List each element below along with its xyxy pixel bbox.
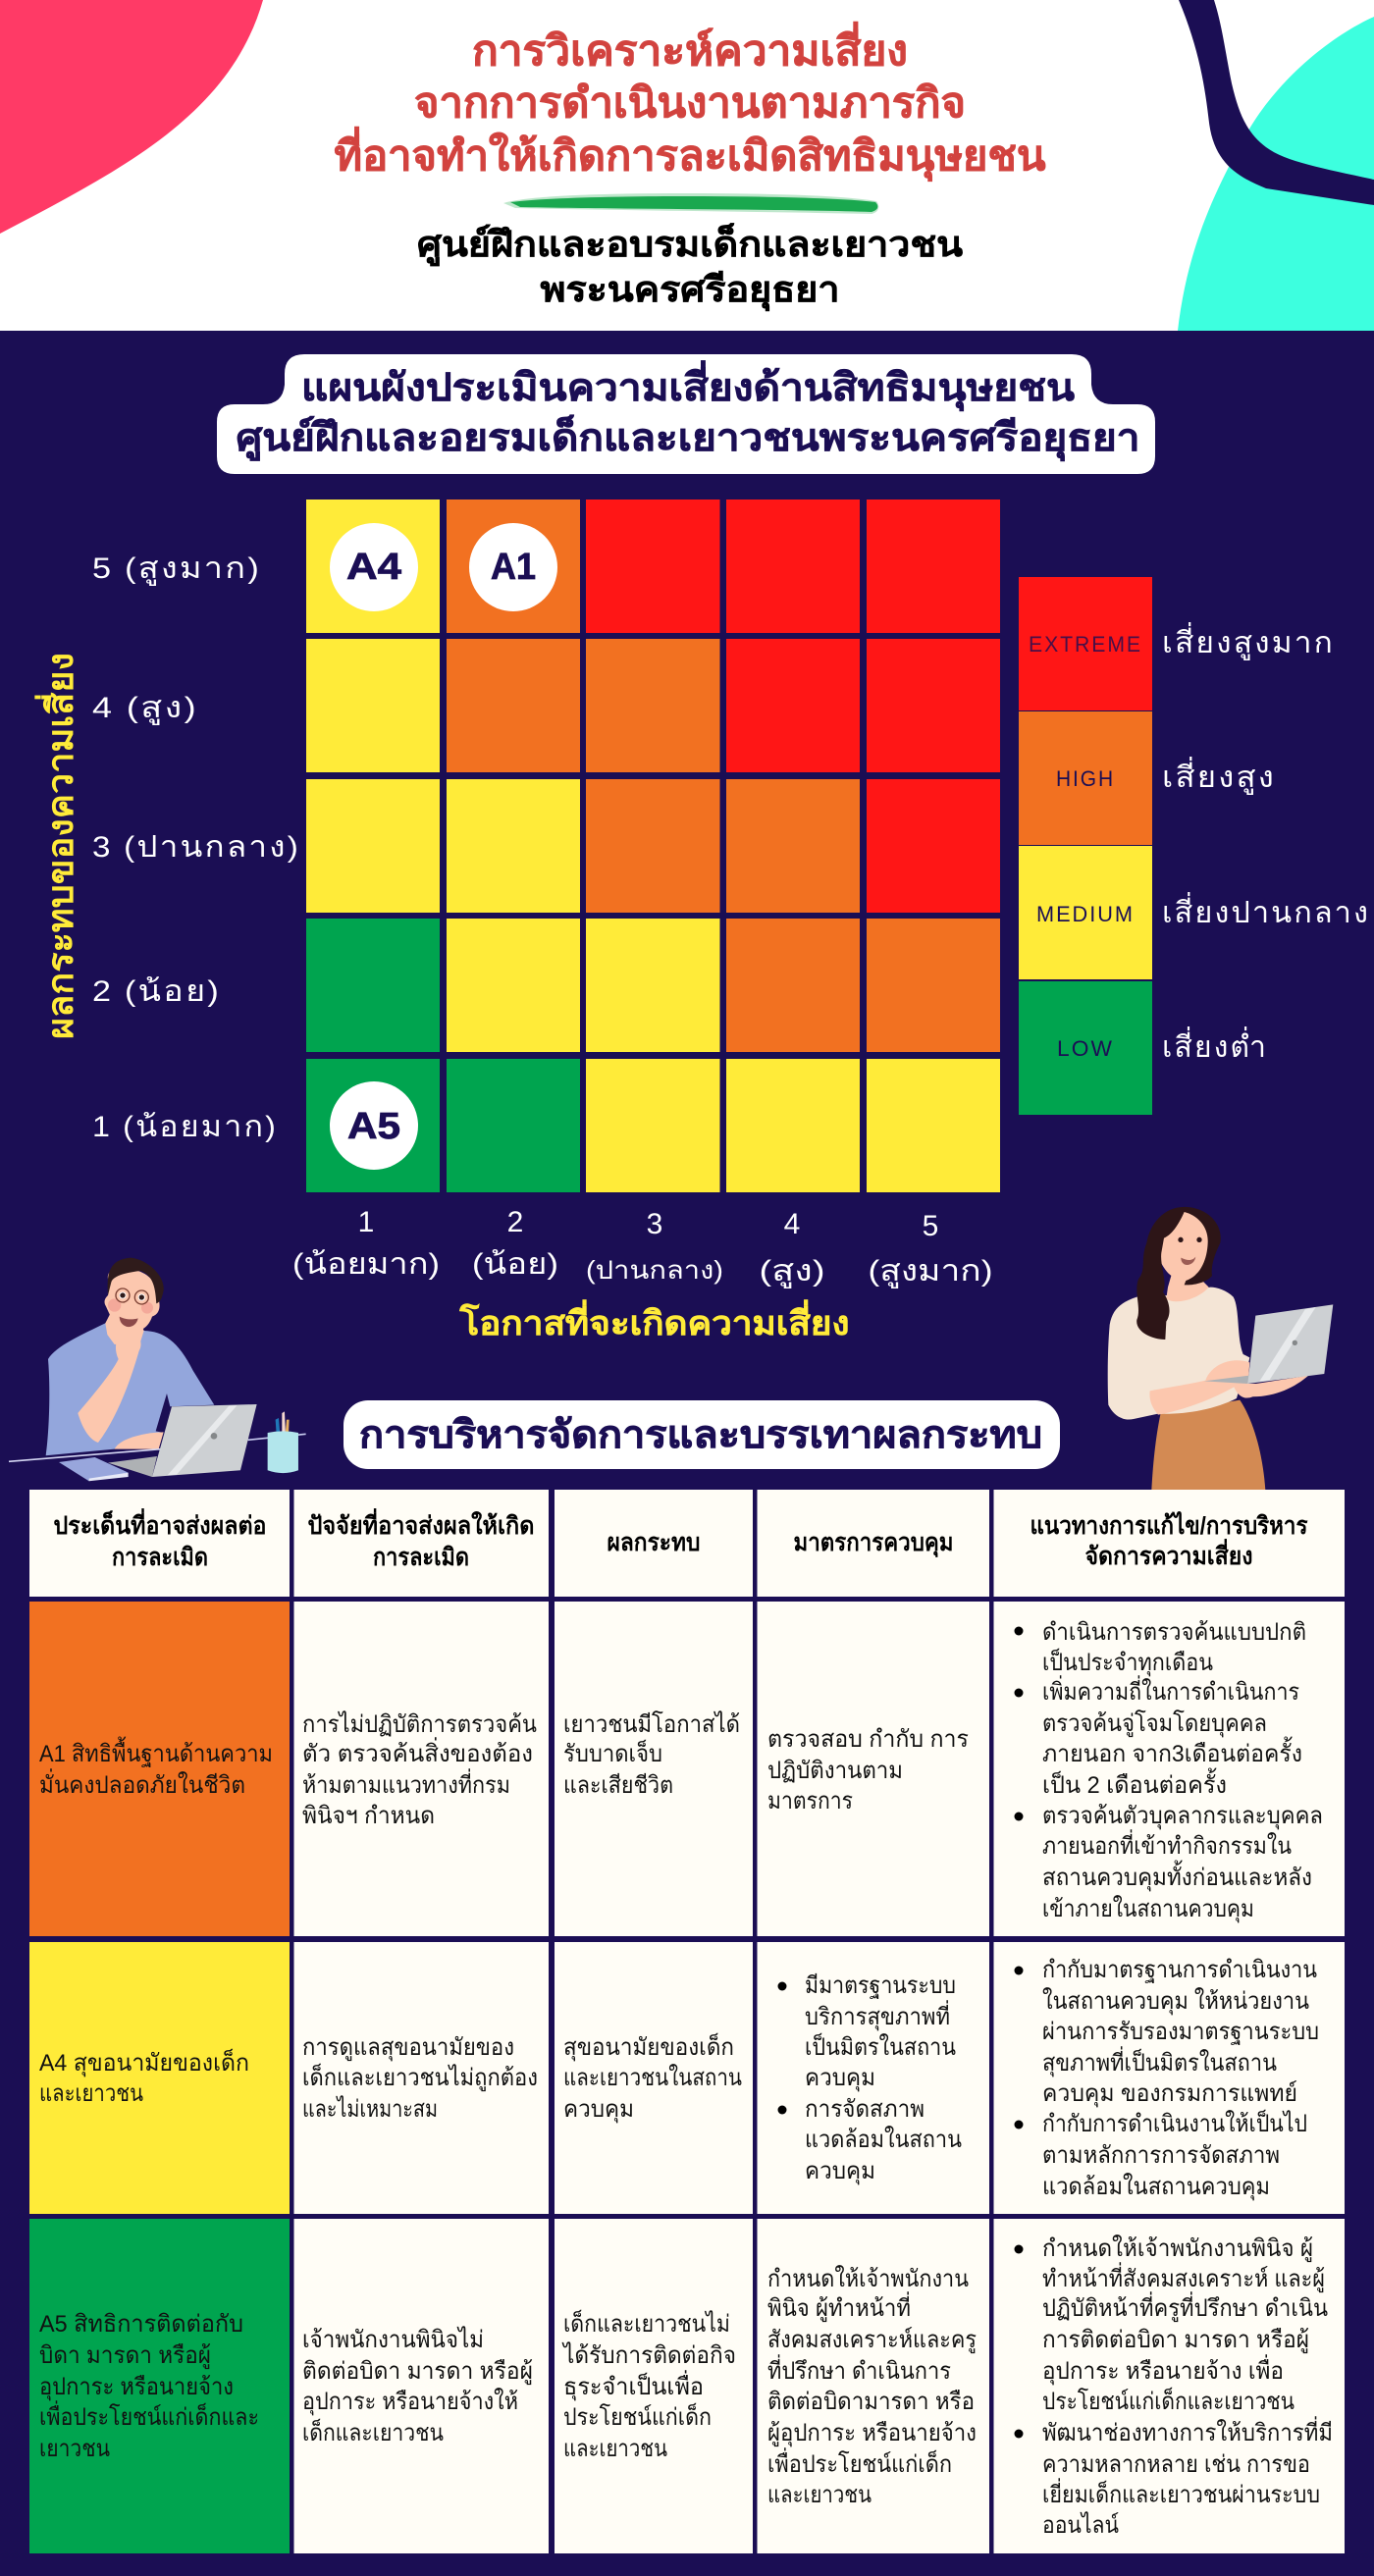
table row: A4: และเยาวชนในสถาน xyxy=(563,2064,742,2091)
table row: A5: ผู้อุปการะ หรือนายจ้าง xyxy=(767,2420,977,2447)
table row: A4: ผ่านการรับรองมาตรฐานระบบ xyxy=(1042,2019,1319,2045)
table row: A1: มาตรการ xyxy=(767,1788,853,1814)
x axis labels: 1 xyxy=(358,1206,374,1238)
table row: A1: และเสียชีวิต xyxy=(563,1772,673,1799)
table row: A4: การจัดสภาพ xyxy=(805,2096,925,2123)
table row: A5: ปฏิบัติหน้าที่ครูที่ปรึกษา ดำเนิน xyxy=(1042,2291,1328,2323)
table row: A4: แวดล้อมในสถานควบคุม xyxy=(1042,2173,1270,2201)
table header row xyxy=(29,1490,1345,1597)
table row: A5: สังคมสงเคราะห์และครู xyxy=(767,2326,977,2354)
table row: A5: อุปการะ หรือนายจ้าง เพื่อ xyxy=(1042,2354,1284,2386)
table header row: การละเมิด xyxy=(373,1544,469,1571)
table row: A1: เข้าภายในสถานควบคุม xyxy=(1042,1895,1254,1923)
legend: low: LOW xyxy=(1057,1036,1114,1061)
matrix heading: แผนผังประเมินความเสี่ยงด้านสิทธิมนุษยชน xyxy=(301,360,1075,411)
table row: A5: พินิจ ผู้ทำหน้าที่ xyxy=(767,2291,911,2323)
table row: A1: ภายนอก จาก3เดือนต่อครั้ง xyxy=(1042,1736,1302,1767)
y axis labels: 2 (น้อย) xyxy=(92,975,221,1008)
panel: white header background xyxy=(0,0,1374,331)
table row: A4: และไม่เหมาะสม xyxy=(302,2095,438,2123)
table row: A5: พัฒนาช่องทางการให้บริการที่มี xyxy=(1042,2416,1333,2446)
table row: A5: A5 สิทธิการติดต่อกับ xyxy=(39,2311,243,2338)
table row: A4: ควบคุม xyxy=(805,2065,875,2092)
table header row: ปัจจัยที่อาจส่งผลให้เกิด xyxy=(308,1508,534,1540)
marker: A5: A5 xyxy=(347,1106,400,1147)
y axis labels: 4 (สูง) xyxy=(92,692,198,725)
x axis labels: 3 xyxy=(647,1208,662,1240)
legend: low xyxy=(1019,981,1268,1115)
table row: A1: เยาวชนมีโอกาสได้ xyxy=(563,1710,740,1738)
table row: A5: เจ้าพนักงานพินิจไม่ xyxy=(302,2326,484,2353)
title: จากการดำเนินงานตามภารกิจ xyxy=(414,79,966,126)
table row: A5: ประโยชน์แก่เด็กและเยาวชน xyxy=(1042,2387,1295,2415)
table row: A4: ควบคุม xyxy=(805,2158,875,2185)
table row: A1: รับบาดเจ็บ xyxy=(563,1739,662,1767)
x axis labels: (น้อย) xyxy=(472,1248,558,1281)
table row: A4: บริการสุขภาพที่ xyxy=(805,2000,950,2031)
marker: A5 xyxy=(330,1081,418,1170)
table header row: แนวทางการแก้ไข/การบริหาร xyxy=(1030,1510,1308,1540)
table header row: ผลกระทบ xyxy=(607,1529,701,1556)
x axis labels xyxy=(292,1206,993,1288)
legend: high: เสี่ยงสูง xyxy=(1162,757,1276,795)
table row: A4: A4 สุขอนามัยของเด็ก xyxy=(39,2048,249,2077)
risk matrix xyxy=(306,499,1000,1192)
table row: A5: เพื่อประโยชน์แก่เด็กและ xyxy=(39,2400,259,2431)
table row: A1: การไม่ปฏิบัติการตรวจค้น xyxy=(302,1710,537,1738)
table row: A4: มีมาตรฐานระบบ xyxy=(805,1972,956,1999)
table row: A1: ตรวจสอบ กำกับ การ xyxy=(767,1726,969,1753)
table row: A5: เด็กและเยาวชน xyxy=(302,2418,444,2446)
table row: A4: ควบคุม xyxy=(563,2096,634,2124)
subtitle: พระนครศรีอยุธยา xyxy=(540,269,840,312)
legend: extreme: EXTREME xyxy=(1029,632,1142,657)
illustration: man at laptop xyxy=(9,1258,306,1481)
table row: A4: กำกับการดำเนินงานให้เป็นไป xyxy=(1042,2109,1307,2137)
green brush stroke xyxy=(503,193,878,214)
x axis title: โอกาสที่จะเกิดความเสี่ยง xyxy=(458,1299,850,1342)
table header row: การละเมิด xyxy=(112,1544,208,1571)
table row: A1: ตรวจค้นตัวบุคลากรและบุคคล xyxy=(1042,1803,1323,1830)
table row: A1: เป็นประจำทุกเดือน xyxy=(1042,1648,1213,1677)
table row: A1: มั่นคงปลอดภัยในชีวิต xyxy=(39,1768,245,1799)
x axis labels: (ปานกลาง) xyxy=(586,1255,723,1285)
decoration: teal blob xyxy=(1178,17,1374,331)
table row: A5: ที่ปรึกษา ดำเนินการ xyxy=(767,2354,951,2385)
table row: A4 xyxy=(29,1942,1345,2214)
x axis labels: 5 xyxy=(923,1210,938,1242)
title: ที่อาจทำให้เกิดการละเมิดสิทธิมนุษยชน xyxy=(334,127,1046,182)
title xyxy=(334,22,1046,182)
table row: A1: A1 สิทธิพื้นฐานด้านความ xyxy=(39,1736,273,1767)
legend: medium xyxy=(1019,846,1370,979)
matrix heading: ศูนย์ฝึกและอยรมเด็กและเยาวชนพระนครศรีอยุธยา xyxy=(236,414,1140,461)
table row: A4: สุขอนามัยของเด็ก xyxy=(563,2032,734,2062)
table row: A1: เพิ่มความถี่ในการดำเนินการ xyxy=(1042,1675,1299,1706)
matrix heading xyxy=(217,354,1155,474)
y axis title: ผลกระทบของความเสี่ยง xyxy=(34,653,80,1039)
decoration: navy curved line xyxy=(1179,0,1374,205)
table xyxy=(29,1490,1345,2553)
x axis labels: (สูงมาก) xyxy=(868,1255,993,1288)
x axis labels: (สูง) xyxy=(760,1255,824,1288)
y axis labels: 5 (สูงมาก) xyxy=(92,552,261,586)
y axis labels: 3 (ปานกลาง) xyxy=(92,831,300,864)
legend: extreme xyxy=(1019,577,1335,710)
table row: A1 xyxy=(29,1602,1345,1936)
decoration: pink blob xyxy=(0,0,263,234)
table row: A4: ควบคุม ของกรมการแพทย์ xyxy=(1042,2079,1297,2108)
table row: A1: สถานควบคุมทั้งก่อนและหลัง xyxy=(1042,1860,1312,1892)
table row: A5: และเยาวชน xyxy=(767,2482,872,2508)
y axis labels: 1 (น้อยมาก) xyxy=(92,1111,278,1143)
table row: A5: ได้รับการติดต่อกิจ xyxy=(561,2341,736,2369)
table row: A5: บิดา มารดา หรือผู้ xyxy=(39,2342,211,2370)
table row: A4: สุขภาพที่เป็นมิตรในสถาน xyxy=(1042,2046,1277,2077)
table row: A5: เด็กและเยาวชนไม่ xyxy=(563,2309,730,2338)
table row: A1: พินิจฯ กำหนด xyxy=(302,1803,435,1829)
table row: A5: ความหลากหลาย เช่น การขอ xyxy=(1042,2451,1310,2478)
table row: A4: และเยาวชน xyxy=(39,2080,143,2107)
legend: high: HIGH xyxy=(1056,766,1115,791)
panel heading: management xyxy=(344,1400,1060,1469)
marker: A4: A4 xyxy=(346,547,401,588)
table row: A5: ธุระจำเป็นเพื่อ xyxy=(563,2370,704,2401)
table header row: จัดการความเสี่ยง xyxy=(1085,1539,1252,1570)
table row: A4: แวดล้อมในสถาน xyxy=(805,2126,962,2153)
table header row: มาตรการควบคุม xyxy=(793,1529,954,1558)
legend: low: เสี่ยงต่ำ xyxy=(1162,1026,1268,1064)
legend: medium: MEDIUM xyxy=(1036,902,1135,926)
x axis labels: 2 xyxy=(507,1206,523,1238)
table row: A5: อุปการะ หรือนายจ้างให้ xyxy=(302,2388,518,2416)
panel heading: management: การบริหารจัดการและบรรเทาผลกระทบ xyxy=(359,1414,1042,1456)
table row: A1: ภายนอกที่เข้าทำกิจกรรมใน xyxy=(1042,1829,1292,1860)
table row: A4: การดูแลสุขอนามัยของ xyxy=(302,2034,514,2062)
table row: A1: ตัว ตรวจค้นสิ่งของต้อง xyxy=(302,1737,533,1767)
table row: A4: เด็กและเยาวชนไม่ถูกต้อง xyxy=(302,2063,538,2092)
table row: A5: เยาวชน xyxy=(39,2436,110,2462)
y axis labels xyxy=(92,552,300,1143)
table row: A5: เพื่อประโยชน์แก่เด็ก xyxy=(767,2447,952,2478)
table row: A4: กำกับมาตรฐานการดำเนินงาน xyxy=(1042,1957,1317,1983)
illustration: woman with laptop xyxy=(1108,1207,1333,1490)
table row: A1: ตรวจค้นจู่โจมโดยบุคคล xyxy=(1042,1709,1267,1738)
table row: A5: ทำหน้าที่สังคมสงเคราะห์ และผู้ xyxy=(1042,2262,1325,2293)
table row: A5: การติดต่อบิดา มารดา หรือผู้ xyxy=(1042,2327,1309,2354)
table row: A4: เป็นมิตรในสถาน xyxy=(805,2032,956,2061)
subtitle: ศูนย์ฝึกและอบรมเด็กและเยาวชน xyxy=(417,222,963,267)
table row: A5: กำหนดให้เจ้าพนักงานพินิจ ผู้ xyxy=(1042,2234,1313,2263)
x axis labels: (น้อยมาก) xyxy=(292,1248,440,1281)
table row: A1: ปฏิบัติงานตาม xyxy=(767,1758,903,1784)
table row: A5 xyxy=(29,2219,1345,2553)
legend: high xyxy=(1019,711,1276,845)
table row: A5: ประโยชน์แก่เด็ก xyxy=(563,2402,712,2431)
table row: A5: ติดต่อบิดา มารดา หรือผู้ xyxy=(302,2358,533,2386)
table row: A5: เยี่ยมเด็กและเยาวชนผ่านระบบ xyxy=(1042,2478,1320,2508)
marker: A1: A1 xyxy=(491,547,536,588)
table row: A1: ดำเนินการตรวจค้นแบบปกติ xyxy=(1042,1619,1306,1646)
table row: A1: ห้ามตามแนวทางที่กรม xyxy=(302,1768,510,1799)
table row: A4: ตามหลักการการจัดสภาพ xyxy=(1042,2142,1280,2169)
x axis labels: 4 xyxy=(784,1208,800,1240)
table row: A5: อุปการะ หรือนายจ้าง xyxy=(39,2374,234,2401)
legend: extreme: เสี่ยงสูงมาก xyxy=(1162,622,1335,660)
table row: A5: ติดต่อบิดามารดา หรือ xyxy=(767,2389,975,2415)
legend: medium: เสี่ยงปานกลาง xyxy=(1162,892,1370,929)
title: การวิเคราะห์ความเสี่ยง xyxy=(472,22,908,74)
marker: A4 xyxy=(330,523,418,611)
table row: A1: เป็น 2 เดือนต่อครั้ง xyxy=(1042,1767,1227,1799)
table row: A5: กำหนดให้เจ้าพนักงาน xyxy=(767,2265,969,2292)
table row: A5: และเยาวชน xyxy=(563,2436,667,2462)
table row: A5: ออนไลน์ xyxy=(1042,2511,1119,2539)
subtitle xyxy=(417,222,963,312)
table row: A4: ในสถานควบคุม ให้หน่วยงาน xyxy=(1042,1987,1309,2016)
marker: A1 xyxy=(469,523,557,611)
table header row: ประเด็นที่อาจส่งผลต่อ xyxy=(53,1508,267,1540)
